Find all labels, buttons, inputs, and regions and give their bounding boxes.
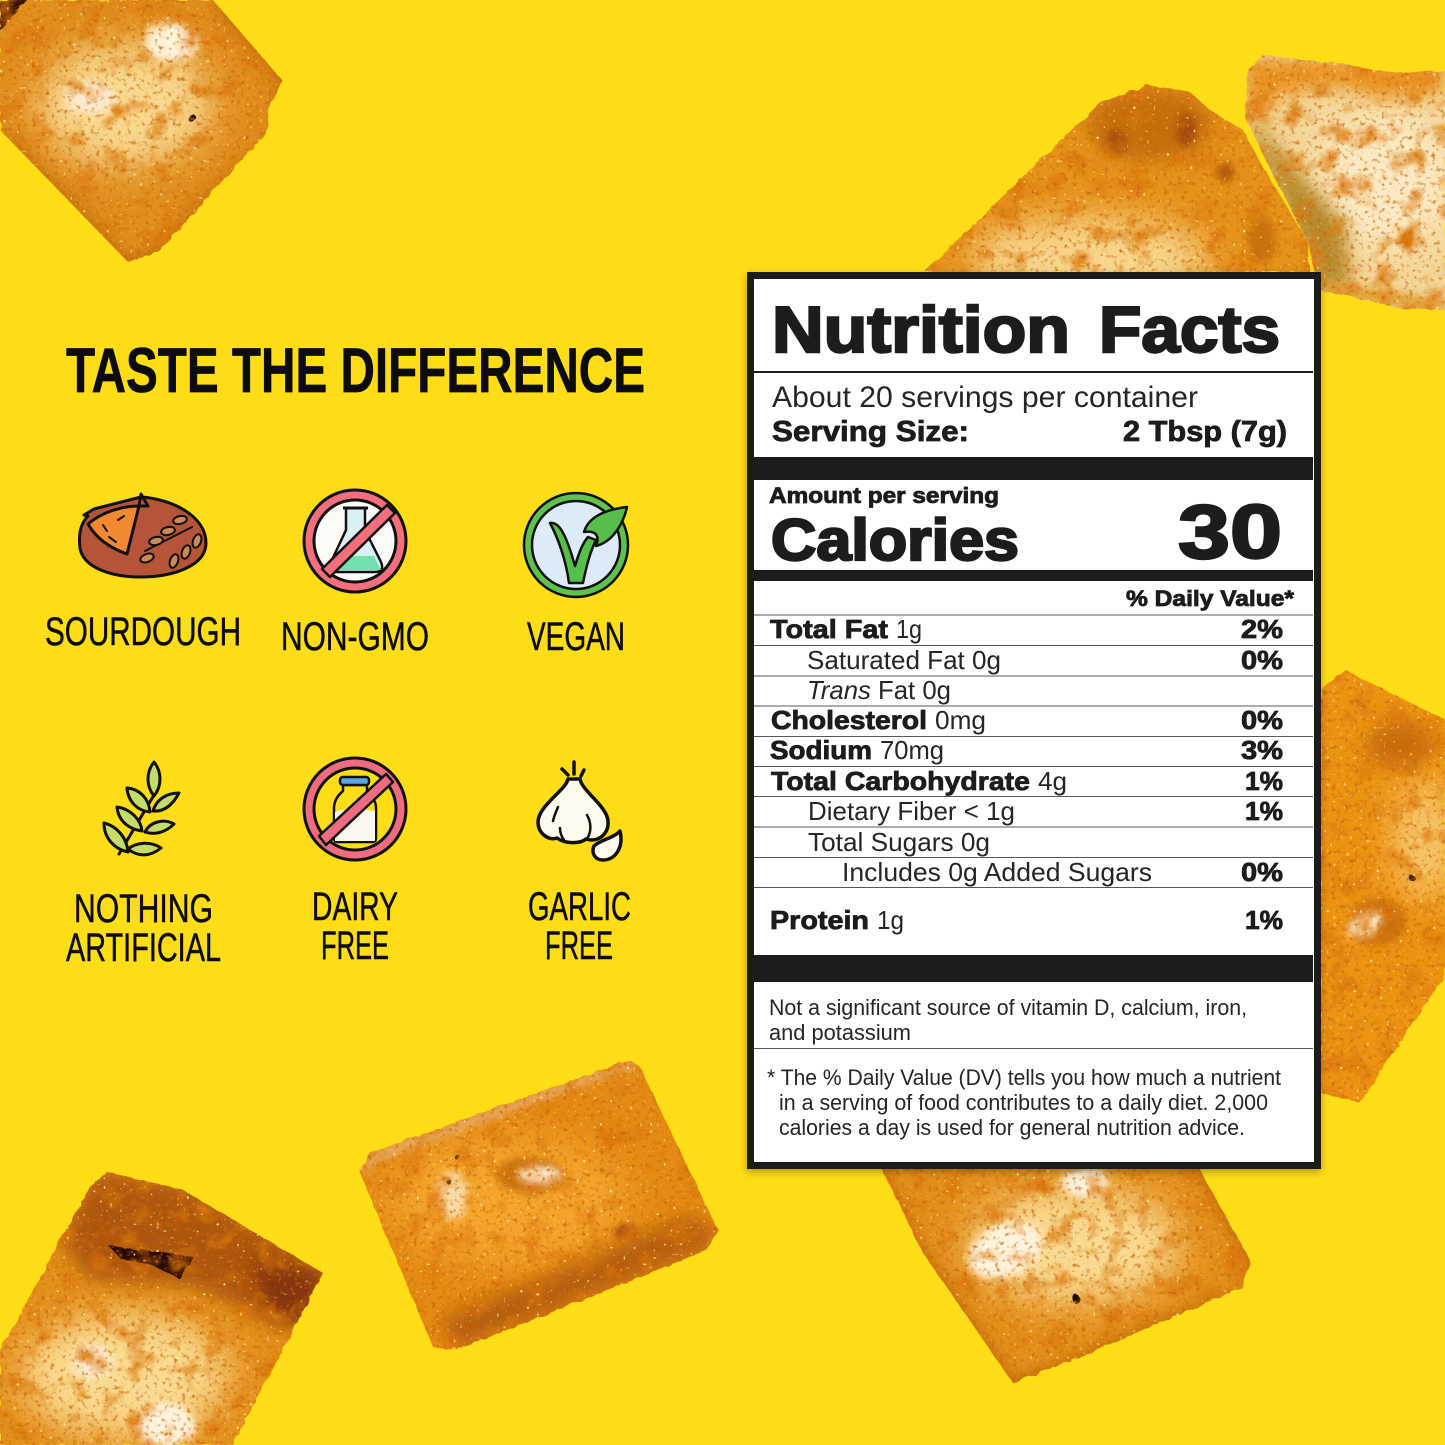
- crouton: bottom centre: [360, 1060, 718, 1350]
- nutrient rows: Sodium: [770, 735, 872, 765]
- calories block: Amount per serving: [769, 483, 999, 508]
- nutrient rows: 0mg: [935, 705, 986, 735]
- nutrient rows: 1%: [1245, 766, 1283, 796]
- label: vegan: VEGAN: [527, 615, 625, 659]
- label: non-GMO: NON-GMO: [281, 615, 429, 659]
- calories block: 30: [1178, 490, 1282, 575]
- icon: sourdough loaf: [79, 494, 206, 577]
- daily value footnote: calories a day is used for general nutrition advice.: [779, 1115, 1245, 1140]
- calories block: [769, 483, 1282, 575]
- label: garlic free: [528, 885, 631, 968]
- nutrient rows: 3%: [1241, 735, 1283, 765]
- label: nothing artificial: NOTHING: [74, 887, 213, 931]
- icon: vegan: [524, 493, 628, 597]
- nutrient rows: Dietary Fiber < 1g: [808, 796, 1015, 826]
- daily value footnote: in a serving of food contributes to a daily diet. 2,000: [779, 1090, 1268, 1115]
- icon: no dairy: [304, 758, 406, 860]
- nutrient rows: 1%: [1245, 796, 1283, 826]
- daily value header: % Daily Value*: [1126, 586, 1294, 611]
- nutrient rows: 1g: [896, 614, 922, 644]
- label: garlic free: FREE: [545, 924, 613, 968]
- nutrient rows: 0%: [1241, 857, 1283, 887]
- nutrient rows: Includes 0g Added Sugars: [842, 857, 1152, 887]
- label: nothing artificial: ARTIFICIAL: [66, 926, 221, 970]
- panel: nutrition facts: [750, 276, 1318, 1166]
- label: sourdough: SOURDOUGH: [45, 610, 241, 654]
- servings block: Serving Size:: [772, 416, 969, 448]
- label: nothing artificial: [66, 887, 221, 970]
- crouton: top right right piece: [1245, 55, 1445, 312]
- nutrient rows: 1g: [877, 905, 904, 935]
- crouton: bottom right: [882, 1169, 1251, 1384]
- nutrient rows: Cholesterol: [771, 705, 927, 735]
- panel frame: [750, 276, 1318, 1166]
- vitamin note: [769, 995, 1247, 1045]
- nutrient rows: Trans Fat 0g: [807, 675, 951, 705]
- nutrient rows: Protein: [770, 905, 869, 935]
- nutrient rows: 0%: [1241, 705, 1283, 735]
- servings block: [754, 371, 1313, 448]
- label: dairy free: [312, 885, 398, 968]
- thick divider lower: [754, 955, 1313, 982]
- nutrient rows: Saturated Fat 0g: [807, 645, 1001, 675]
- vitamin note: and potassium: [769, 1020, 911, 1045]
- nutrient rows: Total Sugars 0g: [808, 827, 990, 857]
- nutrition facts title: Facts: [1099, 293, 1280, 366]
- label: dairy free: DAIRY: [312, 885, 398, 929]
- nutrient rows: 4g: [1038, 766, 1067, 796]
- nutrient rows: 2%: [1241, 614, 1283, 644]
- nutrient rows: 0%: [1241, 645, 1283, 675]
- servings block: About 20 servings per container: [772, 381, 1198, 414]
- daily value footnote: * The % Daily Value (DV) tells you how much a nutrient: [767, 1065, 1281, 1090]
- vitamin note: Not a significant source of vitamin D, calcium, iron,: [769, 995, 1247, 1020]
- crouton: bottom left: [0, 1170, 335, 1445]
- nutrition facts title: [772, 293, 1280, 366]
- medium divider: [754, 570, 1313, 581]
- nutrient rows: [754, 614, 1313, 935]
- label: dairy free: FREE: [321, 924, 389, 968]
- thick divider: [754, 457, 1313, 480]
- servings block: 2 Tbsp (7g): [1123, 416, 1287, 448]
- nutrient rows: Total Fat: [770, 614, 888, 644]
- icon: non-GMO: [304, 490, 406, 592]
- label: garlic free: GARLIC: [528, 885, 631, 929]
- crouton: top left: [0, 0, 282, 262]
- nutrient rows: 1%: [1245, 905, 1283, 935]
- nutrition facts title: Nutrition: [772, 293, 1070, 366]
- crouton: right middle: [1321, 670, 1445, 1103]
- calories block: Calories: [771, 508, 1019, 573]
- heading: taste the difference: TASTE THE DIFFERENCE: [66, 336, 645, 406]
- nutrient rows: Total Carbohydrate: [771, 766, 1030, 796]
- daily value footnote: [767, 1065, 1281, 1140]
- icon: leaf sprig: [104, 762, 179, 855]
- icon: garlic: [538, 762, 621, 860]
- nutrient rows: 70mg: [880, 735, 944, 765]
- crouton: top right left piece: [924, 84, 1310, 272]
